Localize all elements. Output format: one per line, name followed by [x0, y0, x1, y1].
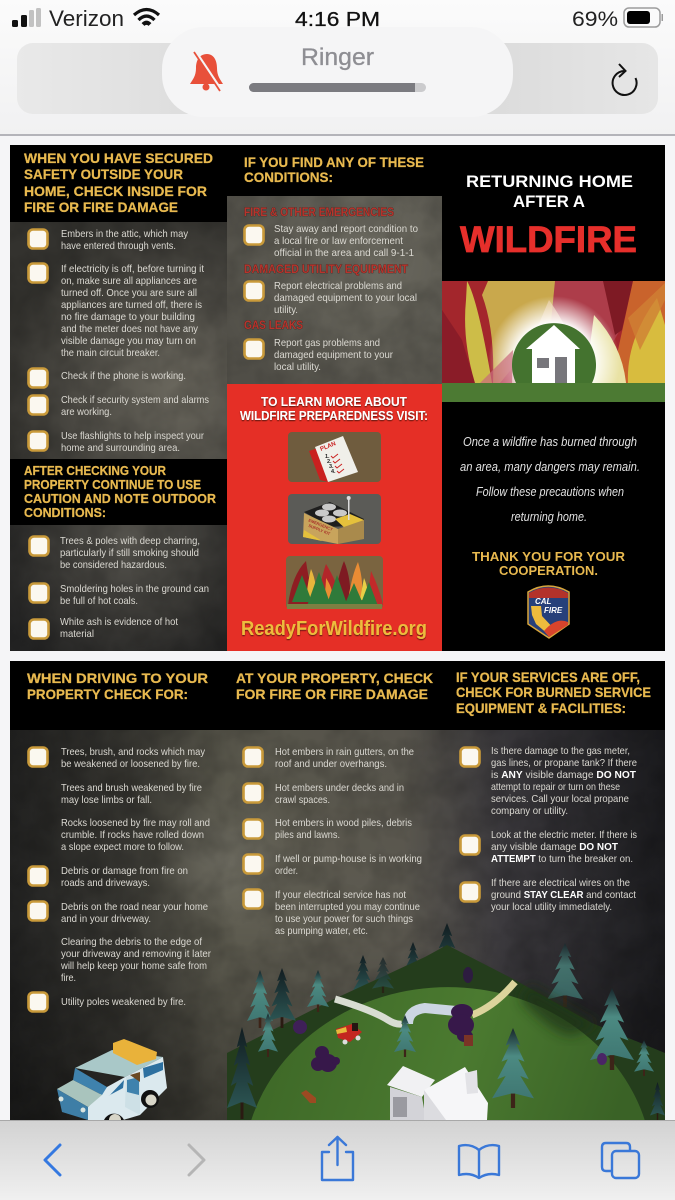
item: weakened trees: may lose limbs or fall. — [61, 794, 152, 806]
item: debris on road — [28, 901, 211, 984]
thank you message: THANK YOU FOR YOUR — [472, 550, 625, 564]
item: charred trees: particularly if still smoking should — [60, 547, 199, 559]
icon: CAL FIRE badge: CAL — [535, 597, 552, 606]
title: WILDFIRE — [460, 218, 637, 260]
thank you message — [472, 550, 625, 578]
heading: check inside — [24, 150, 213, 215]
left column: check inside — [10, 150, 227, 459]
item: weakened trees: a slope expect more to follow. — [61, 841, 184, 853]
heading: check inside: HOME, CHECK INSIDE FOR — [24, 183, 207, 199]
column: at your property — [236, 670, 433, 937]
house — [387, 1066, 488, 1120]
property trees — [227, 957, 665, 1120]
heading: conditions: IF YOU FIND ANY OF THESE — [244, 154, 424, 170]
item: gas meter: attempt to repair or turn on these — [491, 781, 620, 793]
item: embers in attic: Embers in the attic, which may — [61, 228, 189, 240]
panel: cover — [442, 172, 665, 638]
illustration: property on hill — [227, 923, 665, 1120]
heading: conditions — [244, 154, 424, 185]
item: decks: Hot embers under decks and in — [275, 782, 404, 794]
item: electrical service: as pumping water, etc. — [275, 925, 368, 937]
item: flashlights — [28, 430, 204, 454]
item: electricity: and the meter does not have any — [61, 323, 199, 335]
item: wood piles: Hot embers in wood piles, debris — [275, 817, 412, 829]
icon: battery — [624, 8, 663, 27]
image: plan checklist: 1. — [325, 454, 330, 460]
item: utility poles: Utility poles weakened by fire. — [61, 996, 186, 1008]
ringer level bar — [249, 83, 426, 92]
item: gas meter: Is there damage to the gas meter, — [491, 745, 630, 757]
column: services — [456, 669, 651, 913]
item: well: If well or pump-house is in working — [275, 853, 422, 865]
item: gas meter: gas lines, or propane tank? If there — [491, 757, 637, 769]
heading: conditions: CONDITIONS: — [244, 169, 333, 185]
item: electric meter: any visible damage DO NOT — [491, 841, 619, 853]
item: report gas: damaged equipment to your — [274, 349, 393, 361]
icon: bookmarks — [459, 1145, 499, 1178]
item: electricity: appliances are turned off, there is — [61, 299, 202, 311]
browser bottom toolbar — [0, 1120, 675, 1200]
title — [460, 172, 637, 260]
icon: signal bars — [12, 8, 41, 27]
item: report gas: local utility. — [274, 361, 321, 373]
item: gutters: Hot embers in rain gutters, on the — [275, 746, 414, 758]
item: weakened trees: Trees and brush weakened by fire — [61, 782, 202, 794]
item: electricity: on, make sure all appliances are — [61, 275, 197, 287]
heading: check inside: SAFETY OUTSIDE YOUR — [24, 166, 183, 182]
item: electric meter: ATTEMPT to turn the breaker on. — [491, 853, 633, 865]
image: burning forest — [286, 556, 383, 609]
image: plan checklist: 2. — [327, 459, 332, 465]
image: plan checklist: 4. — [331, 469, 336, 475]
icon: reload — [613, 64, 637, 95]
left column: outdoor conditions — [10, 463, 227, 651]
item: debris on road: your driveway and removing it later — [61, 948, 211, 960]
icon: CAL FIRE badge — [528, 586, 569, 638]
icon: tabs — [602, 1143, 639, 1178]
item: debris damage — [28, 865, 188, 889]
icon: wifi — [134, 10, 159, 24]
panel: learn more — [227, 384, 442, 651]
back trees — [353, 923, 583, 1007]
item: debris on road: will help keep your home safe from — [60, 960, 207, 972]
item: gas meter: company or utility. — [491, 805, 568, 817]
item: electricity: the main circuit breaker. — [61, 347, 160, 359]
ringer label: Ringer — [301, 44, 374, 71]
item: charred trees: Trees & poles with deep charring, — [60, 535, 200, 547]
top panel — [10, 145, 665, 651]
item: electrical wires: your local utility immediately. — [491, 901, 612, 913]
item: electricity — [28, 263, 204, 359]
item: smoldering holes: Smoldering holes in the ground can — [60, 583, 209, 595]
intro text: an area, many dangers may remain. — [460, 460, 640, 474]
item: debris on road: and in your driveway. — [61, 913, 151, 925]
item: debris damage: Debris or damage from fire on — [61, 865, 188, 877]
item: decks — [244, 782, 404, 806]
item: electric meter — [460, 829, 637, 865]
item: flashlights: home and surrounding area. — [61, 442, 180, 454]
intro text: Once a wildfire has burned through — [463, 435, 637, 449]
ringer pill — [162, 27, 513, 117]
address bar — [17, 43, 658, 114]
image: emergency supply kit — [288, 494, 381, 544]
column: driving — [27, 670, 211, 1012]
item: report condition: a local fire or law enforcement — [274, 235, 403, 247]
heading: driving: WHEN DRIVING TO YOUR — [27, 670, 208, 686]
item: electrical wires — [460, 877, 636, 913]
item: security system: Check if security system and alarms — [61, 394, 209, 406]
image: plan checklist — [288, 432, 381, 482]
heading: driving: PROPERTY CHECK FOR: — [27, 686, 188, 702]
browser top bar — [0, 0, 675, 136]
heading: at your property — [236, 670, 433, 702]
item: wood piles — [244, 817, 412, 841]
icon: muted bell — [190, 52, 223, 91]
item: electricity: If electricity is off, before turning it — [61, 263, 204, 275]
item: electric meter: Look at the electric meter. If there is — [491, 829, 637, 841]
item: white ash — [30, 616, 178, 640]
item: white ash: White ash is evidence of hot — [60, 616, 178, 628]
item: security system: are working. — [61, 406, 112, 418]
bottom panel — [10, 661, 665, 1120]
carrier name: Verizon — [49, 6, 124, 31]
item: debris damage: roads and driveways. — [61, 877, 150, 889]
image: plan checklist: PLAN — [320, 441, 337, 453]
intro text: Follow these precautions when — [476, 485, 624, 499]
item: weakened trees: crumble. If rocks have rolled down — [61, 829, 204, 841]
learn more heading — [240, 395, 428, 423]
item: well: order. — [275, 865, 298, 877]
intro text — [460, 435, 640, 524]
icon: back — [45, 1145, 60, 1175]
item: weakened trees: Rocks loosened by fire may roll and — [61, 817, 210, 829]
title: AFTER A — [513, 192, 585, 211]
item: report electrical — [244, 280, 417, 316]
illustration: house in flames — [442, 281, 665, 402]
intro text: returning home. — [511, 510, 587, 524]
item: security system — [28, 394, 209, 418]
subheading: damaged utility: DAMAGED UTILITY EQUIPMENT — [244, 264, 408, 276]
riding mower — [336, 1023, 362, 1044]
heading: at your property: FOR FIRE OR FIRE DAMAGE — [236, 686, 428, 702]
item: report gas — [244, 337, 393, 373]
item: report electrical: utility. — [274, 304, 298, 316]
heading: check inside: WHEN YOU HAVE SECURED — [24, 150, 213, 166]
log pile — [301, 1090, 316, 1103]
item: electricity: turned off. Once you are sure all — [61, 287, 197, 299]
item: gutters — [244, 746, 414, 770]
lawn — [251, 987, 645, 1120]
icon: house in circle — [512, 323, 596, 384]
item: flashlights: Use flashlights to help inspect your — [61, 430, 204, 442]
item: report electrical: Report electrical problems and — [274, 280, 402, 292]
item: well — [244, 853, 422, 877]
item: electrical service: If your electrical service has not — [275, 889, 406, 901]
item: report electrical: damaged equipment to your local — [274, 292, 417, 304]
item: electricity: no fire damage to your building — [61, 311, 195, 323]
item: debris on road: Debris on the road near your home — [61, 901, 208, 913]
item: electrical wires: ground STAY CLEAR and contact — [491, 889, 636, 901]
item: embers in attic — [28, 228, 189, 252]
item: debris on road: Clearing the debris to the edge of — [61, 936, 202, 948]
item: electrical service: to use your power for such things — [275, 913, 413, 925]
illustration: SUV — [57, 1039, 167, 1120]
item: phone — [28, 368, 186, 388]
item: phone: Check if the phone is working. — [61, 370, 186, 382]
item: smoldering holes: be full of hot coals. — [60, 595, 138, 607]
driveway — [335, 982, 515, 1024]
thank you message: COOPERATION. — [499, 564, 598, 578]
hill — [227, 945, 665, 1120]
heading: driving — [27, 670, 208, 702]
heading: services: IF YOUR SERVICES ARE OFF, — [456, 669, 640, 685]
item: wood piles: piles and lawns. — [275, 829, 340, 841]
item: utility poles — [28, 992, 186, 1012]
middle column: conditions — [227, 154, 442, 384]
item: report condition — [244, 223, 418, 259]
heading: check inside: FIRE OR FIRE DAMAGE — [24, 199, 178, 215]
item: electrical wires: If there are electrical wires on the — [491, 877, 630, 889]
subheading: fire emergencies: FIRE & OTHER EMERGENCIES — [244, 207, 394, 219]
icon: forward — [189, 1145, 204, 1175]
item: electrical service: been interrupted you may continue — [275, 901, 420, 913]
item: weakened trees: Trees, brush, and rocks which may — [61, 746, 206, 758]
item: report condition: Stay away and report condition to — [274, 223, 418, 235]
hill shadow — [520, 985, 597, 1036]
item: debris on road: fire. — [61, 972, 76, 984]
heading: outdoor conditions — [24, 463, 217, 520]
heading: services — [456, 669, 651, 716]
image: plan checklist: 3. — [329, 464, 334, 470]
heading: at your property: AT YOUR PROPERTY, CHECK — [236, 670, 433, 686]
icon: CAL FIRE badge: FIRE — [544, 606, 563, 615]
item: report condition: official in the area and call 9-1-1 — [274, 247, 414, 259]
purple bushes — [293, 967, 607, 1072]
subheading: gas leaks: GAS LEAKS — [244, 320, 303, 332]
heading: services: EQUIPMENT & FACILITIES: — [456, 700, 626, 716]
item: smoldering holes — [30, 583, 209, 607]
website link: ReadyForWildfire.org — [241, 618, 427, 640]
heading: outdoor conditions: CONDITIONS: — [24, 505, 106, 520]
item: white ash: material — [60, 628, 94, 640]
item: charred trees — [30, 535, 200, 571]
item: decks: crawl spaces. — [275, 794, 330, 806]
item: report gas: Report gas problems and — [274, 337, 380, 349]
item: embers in attic: have entered through vents. — [61, 240, 176, 252]
item: weakened trees — [28, 746, 210, 853]
item: weakened trees: be weakened or loosened by fire. — [61, 758, 200, 770]
image: emergency supply kit: EMERGENCY — [308, 518, 334, 532]
heading: services: CHECK FOR BURNED SERVICE — [456, 684, 651, 700]
item: gas meter: services. Call your local propane — [491, 793, 629, 805]
heading: outdoor conditions: PROPERTY CONTINUE TO USE — [24, 477, 201, 492]
item: gas meter: is ANY visible damage DO NOT — [491, 769, 637, 781]
learn more heading: TO LEARN MORE ABOUT — [261, 395, 407, 409]
heading: outdoor conditions: AFTER CHECKING YOUR — [24, 463, 167, 478]
image: emergency supply kit: SUPPLY KIT — [308, 523, 332, 536]
item: gutters: roof and under overhangs. — [275, 758, 387, 770]
icon: share — [322, 1137, 353, 1180]
learn more heading: WILDFIRE PREPAREDNESS VISIT: — [240, 409, 428, 423]
clock: 4:16 PM — [295, 8, 380, 31]
title: RETURNING HOME — [466, 172, 633, 191]
item: gas meter — [460, 745, 637, 817]
item: electricity: visible damage you may turn on — [61, 335, 196, 347]
battery percent: 69% — [572, 8, 618, 31]
heading: outdoor conditions: CAUTION AND NOTE OUTDOOR — [24, 491, 217, 506]
item: electrical service — [244, 889, 420, 937]
item: charred trees: be considered hazardous. — [60, 559, 167, 571]
